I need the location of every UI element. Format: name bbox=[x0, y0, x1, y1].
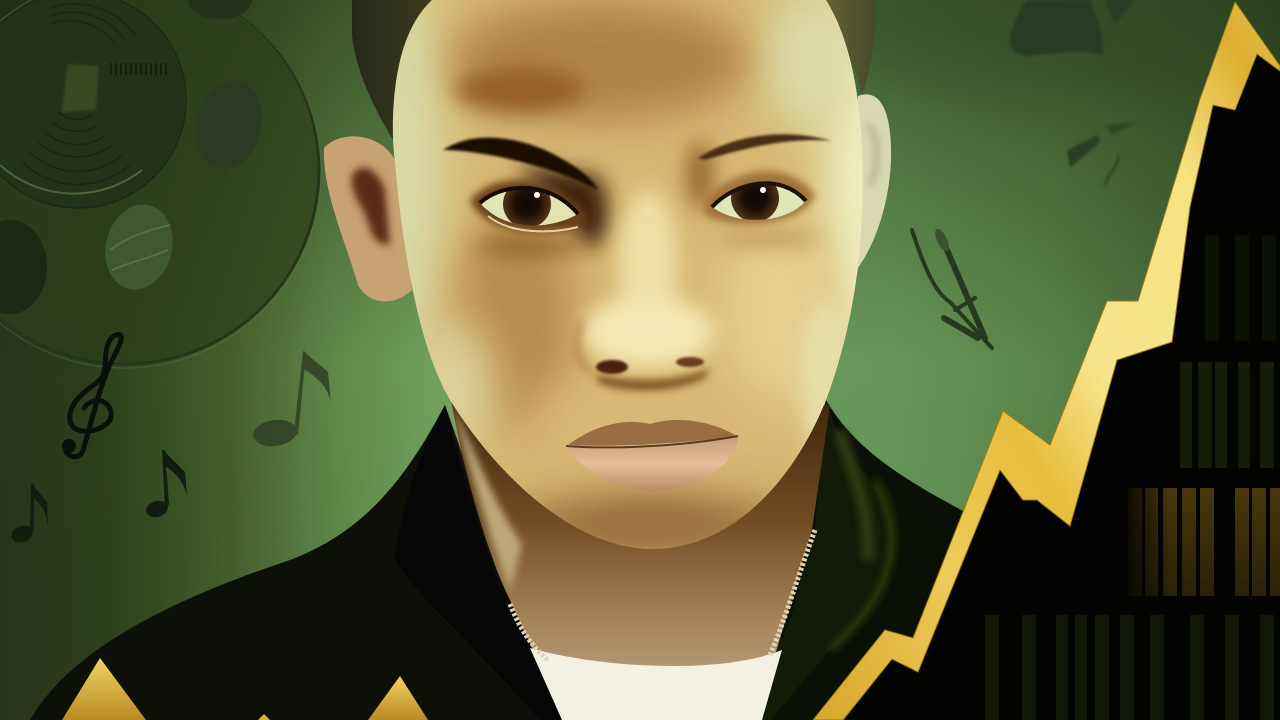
neck left highlight bbox=[450, 400, 522, 590]
eyebrow right bbox=[698, 134, 832, 160]
icon: tilted music note bbox=[912, 227, 992, 348]
gold chain necklace bbox=[510, 530, 815, 660]
eye right bbox=[705, 171, 815, 224]
icon: small music note bbox=[9, 484, 48, 545]
jacket bbox=[30, 400, 965, 720]
hair bbox=[352, 0, 876, 140]
bars row 3 bbox=[1128, 488, 1280, 596]
rising gold arrow line bbox=[813, 2, 1280, 720]
white t-shirt bbox=[530, 648, 782, 720]
face bbox=[392, 0, 863, 549]
ear left bbox=[324, 136, 412, 301]
icon: treble clef bbox=[62, 335, 121, 457]
mouth bbox=[566, 420, 738, 491]
reel hole spokes bbox=[62, 64, 98, 112]
face: skin shading bbox=[367, 0, 913, 553]
eyebrow left bbox=[443, 138, 598, 190]
faint bars in silhouette bbox=[985, 235, 1280, 720]
black silhouette under arrow bbox=[843, 54, 1280, 720]
icon: faint notes upper right bbox=[1010, 0, 1138, 185]
neck bbox=[450, 395, 830, 674]
bars row 4 bbox=[985, 615, 1274, 720]
icon: medium music note bbox=[144, 450, 187, 520]
ear right bbox=[855, 94, 891, 272]
icon: large music note bbox=[251, 351, 331, 449]
bars row 1 bbox=[1205, 235, 1276, 341]
jacket collar right bbox=[745, 400, 894, 720]
bars row 2 bbox=[1180, 362, 1274, 468]
jacket collar left bbox=[395, 405, 565, 720]
reel hub rings bbox=[0, 0, 186, 208]
gold triangle small bbox=[258, 714, 270, 720]
gold triangle left bbox=[62, 658, 146, 720]
gold triangle right bbox=[368, 676, 428, 720]
reel holes bbox=[0, 0, 271, 314]
eye left bbox=[470, 180, 586, 232]
nose bbox=[577, 190, 714, 390]
film reel embossed disc bbox=[0, 0, 321, 368]
